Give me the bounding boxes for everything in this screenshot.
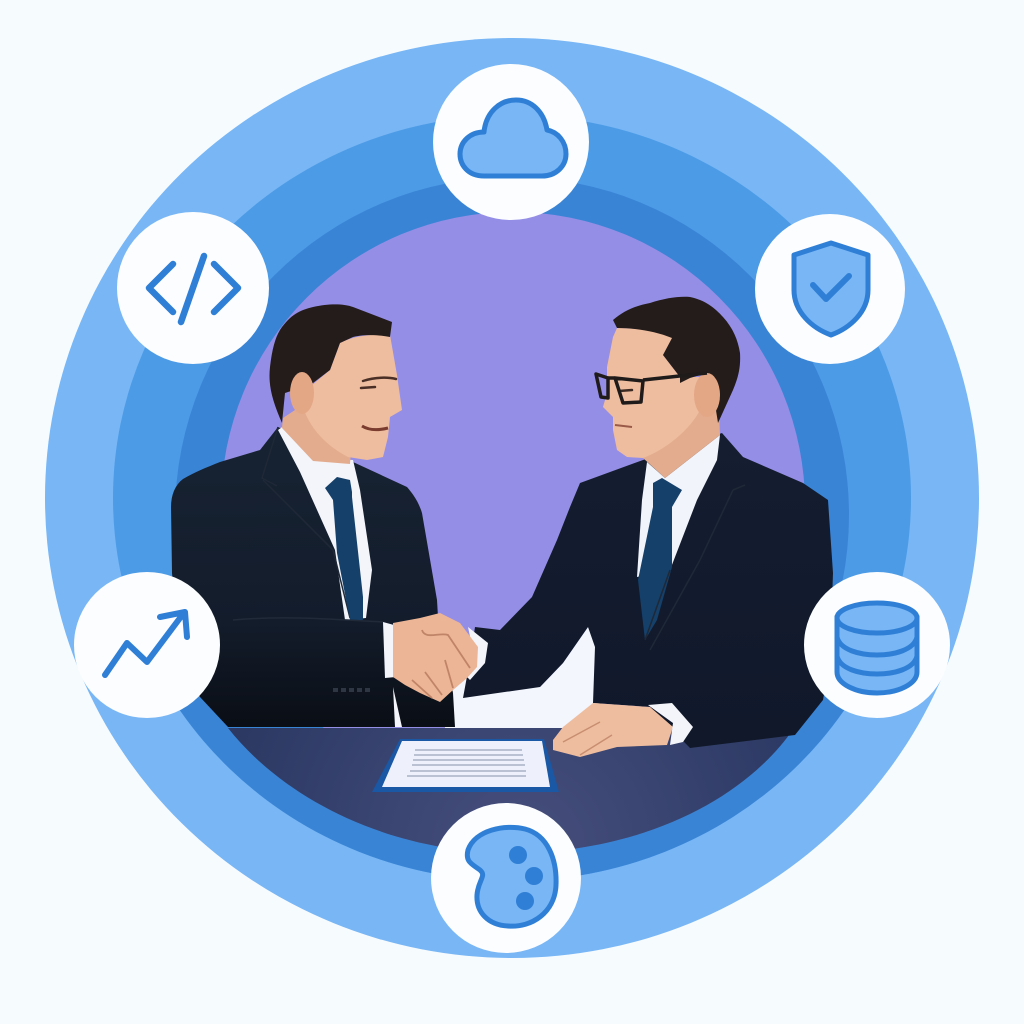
lower part of ring in darker blue — [180, 696, 844, 876]
right lapel edge — [645, 485, 745, 650]
right wrist cuff — [466, 627, 488, 680]
icon: code brackets — [117, 212, 269, 364]
icon: database — [804, 572, 950, 718]
icon: cloud — [433, 64, 589, 220]
document page — [382, 741, 550, 787]
left shirt — [278, 425, 372, 620]
icon: trending chart arrow — [74, 572, 220, 718]
right ear — [694, 373, 720, 417]
left neck — [282, 400, 352, 464]
right hand on table — [553, 703, 673, 757]
right face — [603, 328, 712, 458]
right finger lines — [563, 722, 612, 755]
left ear — [290, 372, 314, 414]
person right — [463, 297, 833, 757]
purple centre circle — [221, 212, 805, 798]
right hair — [613, 297, 740, 423]
inner ring — [175, 177, 849, 853]
document frame — [372, 739, 559, 792]
icon: palette — [431, 803, 581, 953]
right jacket — [463, 433, 833, 748]
left jacket lapel edge — [262, 427, 350, 618]
right table cuff — [648, 703, 693, 745]
left hair — [270, 304, 392, 423]
person left — [171, 304, 455, 727]
right glasses — [596, 373, 707, 403]
light gap below the sleeve — [445, 627, 600, 730]
right shirt — [637, 435, 720, 577]
left eye and brow — [361, 378, 396, 388]
right mouth — [615, 425, 632, 427]
document on table — [372, 739, 559, 792]
document lines — [407, 750, 526, 776]
handshake — [393, 613, 478, 702]
right tie — [638, 478, 682, 640]
left cuff — [383, 622, 396, 678]
table — [228, 728, 794, 853]
strip below left hand — [393, 687, 402, 727]
left sleeve buttons — [333, 688, 370, 692]
left jacket — [171, 427, 455, 727]
handshake finger lines — [412, 630, 470, 698]
middle ring — [113, 115, 911, 881]
right eye — [619, 390, 632, 391]
left face — [300, 335, 402, 460]
left sleeve seam — [233, 618, 383, 622]
left smile — [362, 426, 388, 430]
right neck — [643, 390, 720, 478]
left tie — [325, 477, 363, 620]
icon: shield with check — [755, 214, 905, 364]
